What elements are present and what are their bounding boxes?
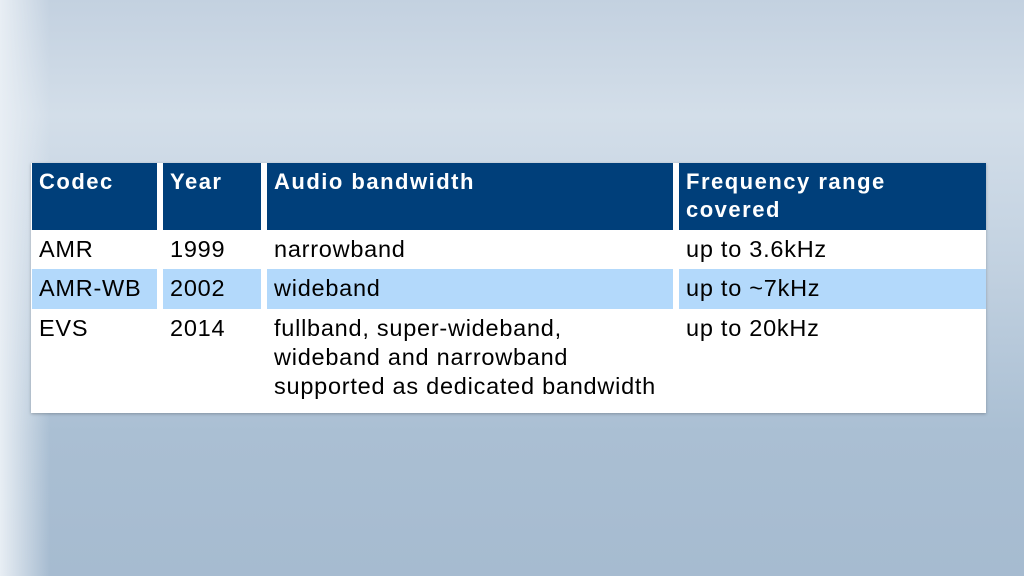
table: codec comparison: fullband, super-wideband, bbox=[274, 315, 562, 341]
row: AMR-WB bbox=[32, 269, 157, 309]
row: AMR-WB: AMR-WB bbox=[39, 275, 141, 301]
header: Year: Year bbox=[170, 169, 222, 194]
table: codec comparison: wideband bbox=[274, 275, 381, 301]
table: codec comparison: up to ~7kHz bbox=[686, 275, 820, 301]
header: Codec: Codec bbox=[39, 169, 114, 194]
header: Frequency range: Frequency range bbox=[686, 169, 886, 194]
header: Frequency range bbox=[679, 163, 986, 230]
table: codec comparison: wideband and narrowband bbox=[274, 344, 568, 370]
table: codec comparison: narrowband bbox=[274, 236, 406, 262]
table: codec comparison: up to 3.6kHz bbox=[686, 236, 827, 262]
table: codec comparison: 2014 bbox=[170, 315, 225, 341]
table: codec comparison bbox=[31, 163, 986, 413]
table: codec comparison: up to 20kHz bbox=[686, 315, 820, 341]
header: Codec bbox=[32, 163, 157, 230]
header: Frequency range: covered bbox=[686, 197, 781, 222]
header: Audio bandwidth: Audio bandwidth bbox=[274, 169, 475, 194]
table: codec comparison: supported as dedicated bandwidth bbox=[274, 373, 656, 399]
header: Year bbox=[163, 163, 261, 230]
row: AMR: AMR bbox=[39, 236, 93, 262]
table: codec comparison: 2002 bbox=[170, 275, 225, 301]
table: codec comparison: 1999 bbox=[170, 236, 225, 262]
row: EVS: EVS bbox=[39, 315, 88, 341]
header: Audio bandwidth bbox=[267, 163, 673, 230]
